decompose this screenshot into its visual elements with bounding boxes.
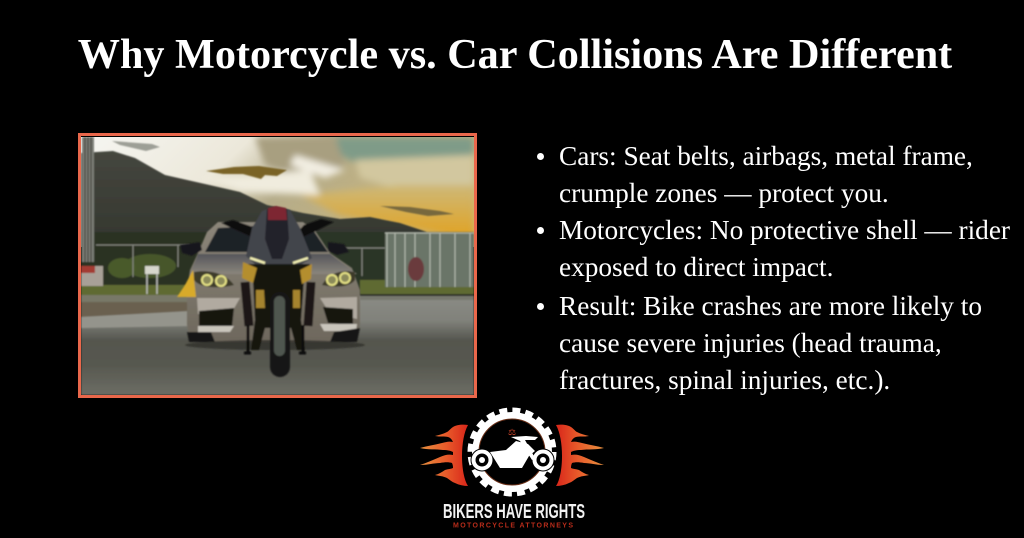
car	[187, 222, 360, 342]
right flames	[556, 425, 604, 486]
motorcycle	[221, 219, 334, 239]
logo: Bikers Have Rights	[420, 408, 604, 530]
bullet: cars: crumple zones — protect you.	[559, 178, 889, 208]
photo background	[80, 134, 476, 396]
pole tower	[82, 137, 94, 262]
bullet: motorcycles: Motorcycles: No protective shell — rider	[559, 215, 1010, 245]
bullet: result	[537, 291, 982, 395]
photo border	[80, 134, 476, 396]
gear badge: ⚖	[508, 428, 516, 438]
logo tagline: MOTORCYCLE ATTORNEYS	[453, 522, 573, 530]
left flames	[420, 425, 468, 486]
gear badge	[470, 410, 554, 494]
sign	[145, 266, 159, 274]
title: Why Motorcycle vs. Car Collisions Are Different	[78, 31, 952, 78]
fence	[385, 233, 474, 287]
bullet: result: fractures, spinal injuries, etc.).	[559, 365, 890, 395]
motorcycle icon	[471, 436, 554, 471]
tree line and foliage	[82, 232, 206, 265]
bullet: motorcycles	[537, 215, 1010, 282]
ground	[81, 296, 474, 395]
bullet: motorcycles: exposed to direct impact.	[559, 252, 833, 282]
bullet: cars: Cars: Seat belts, airbags, metal frame,	[559, 141, 973, 171]
mountains	[81, 151, 474, 300]
bullet: result: cause severe injuries (head trauma,	[559, 328, 942, 358]
bullet: result: Result: Bike crashes are more likely to	[559, 291, 982, 321]
bullet list	[537, 141, 1010, 395]
bullet: cars	[537, 141, 973, 208]
photo: motorcycle in front of car	[78, 133, 477, 398]
